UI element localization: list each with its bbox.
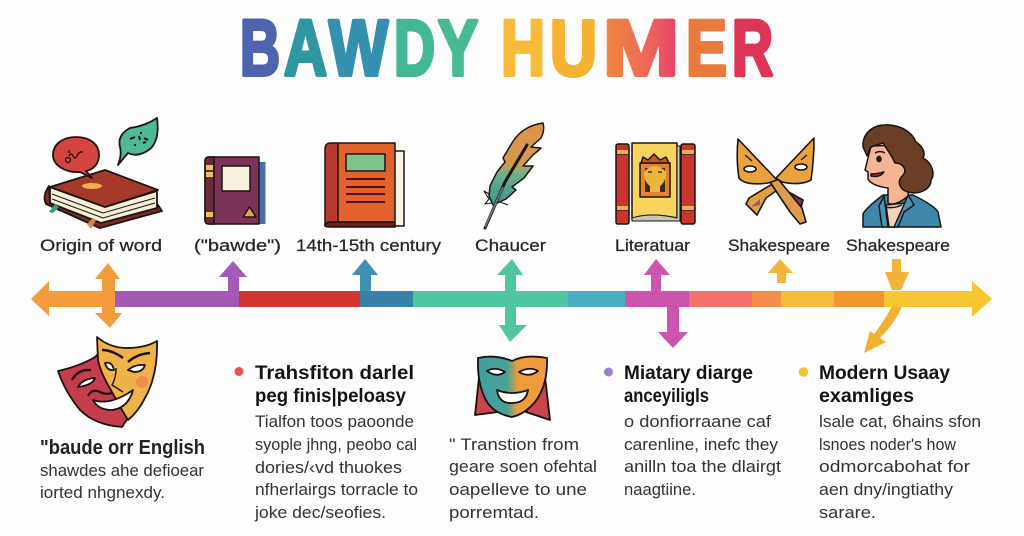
text block: transition xyxy=(234,363,418,522)
text block: modern usage: lsnoes noder's how xyxy=(819,436,956,454)
icon: feather xyxy=(484,123,544,228)
text block: modern usage: odmorcabohat for xyxy=(819,458,971,476)
label: Shakespeare: Shakespeare xyxy=(728,236,830,255)
text block: military: anilln toa the dlairgt xyxy=(624,458,781,476)
arrow: small yellow up xyxy=(768,259,793,283)
text block: transition from: geare soen ofehtal xyxy=(449,458,597,476)
text block: transition: syople jhng, peobo cal xyxy=(255,436,417,454)
arrow: magenta up xyxy=(644,259,670,292)
title: E xyxy=(686,3,727,92)
arrow: teal up and down xyxy=(497,259,527,342)
text block: modern usage: lsale cat, 6hains sfon xyxy=(819,413,981,431)
icon: orange book xyxy=(325,143,404,227)
text block: modern usage: sarare. xyxy=(819,504,876,522)
text block: military: carenline, inefc they xyxy=(624,436,779,454)
icon: comedy and tragedy masks xyxy=(58,337,157,427)
title: Y xyxy=(438,3,478,92)
arrow: yellow down xyxy=(885,259,909,290)
bullet xyxy=(604,368,613,376)
label: 14th-15th century: 14th-15th century xyxy=(296,236,442,255)
text block: transition: peg finis|peloasy xyxy=(255,386,406,407)
arrow: diagonal amber xyxy=(864,306,902,353)
heading: Trahsfiton darlel xyxy=(255,363,414,384)
text block: transition: Tialfon toos paoonde xyxy=(255,413,414,431)
heading: "baude orr English xyxy=(40,437,205,459)
title: U xyxy=(550,3,597,92)
text block: military: naagtiine. xyxy=(624,481,696,499)
title: A xyxy=(284,3,327,92)
text block: military xyxy=(604,363,781,499)
text block: military: o donfiorraane caf xyxy=(624,413,771,431)
title: W xyxy=(329,3,388,92)
arrow: blue up xyxy=(352,259,378,292)
icon: purple book xyxy=(205,157,266,224)
arrow: purple up xyxy=(219,261,247,292)
text block: transition: dories/‹vd thuokes xyxy=(255,459,402,477)
title: B xyxy=(240,3,280,92)
text block: modern usage: examliges xyxy=(819,386,914,407)
title xyxy=(240,3,773,92)
text block: transition: nfherlairgs torracle to xyxy=(255,481,418,499)
bar segments xyxy=(49,291,115,307)
label: Origin of word: Origin of word xyxy=(40,236,162,255)
label: bawde: ("bawde") xyxy=(194,236,281,255)
arrow: left end and origin marker xyxy=(31,263,122,328)
text block: transition from: " Transtion from xyxy=(449,436,579,454)
title: R xyxy=(732,3,773,92)
text block: transition from xyxy=(449,436,597,522)
text block: modern usage xyxy=(799,363,981,522)
icon: woman portrait xyxy=(863,125,941,227)
heading: Miatary diarge xyxy=(624,363,753,384)
bullet xyxy=(234,367,244,376)
label: Shakespeare portrait: Shakespeare xyxy=(846,236,950,255)
text block: transition from: oapelleve to une xyxy=(449,481,587,499)
text block: modern usage: aen dny/ingtiathy xyxy=(819,481,954,499)
text block: transition: joke dec/seofies. xyxy=(254,504,386,522)
icon: book with speech bubbles xyxy=(45,118,162,229)
text block: bawde in English xyxy=(40,437,205,502)
text block: military: anceyiligls xyxy=(624,386,709,407)
text block: bawde in English: iorted nhgnexdy. xyxy=(40,484,165,502)
text block: transition from: porremtad. xyxy=(449,504,539,522)
title: M xyxy=(603,3,679,92)
bullet xyxy=(799,367,808,377)
title: H xyxy=(501,3,545,92)
text block: bawde in English: shawdes ahe defioear xyxy=(40,462,205,480)
label: Chaucer: Chaucer xyxy=(475,236,546,255)
arrow: magenta down xyxy=(658,306,688,348)
icon: teal-orange mask with cape xyxy=(475,357,550,420)
heading: Modern Usaay xyxy=(819,363,950,384)
title: D xyxy=(394,3,435,92)
icon: crossed masks xyxy=(737,138,814,224)
label: Literatuar: Literatuar xyxy=(615,236,690,255)
icon: book with columns xyxy=(616,143,695,224)
timeline bar with arrows xyxy=(31,259,992,353)
